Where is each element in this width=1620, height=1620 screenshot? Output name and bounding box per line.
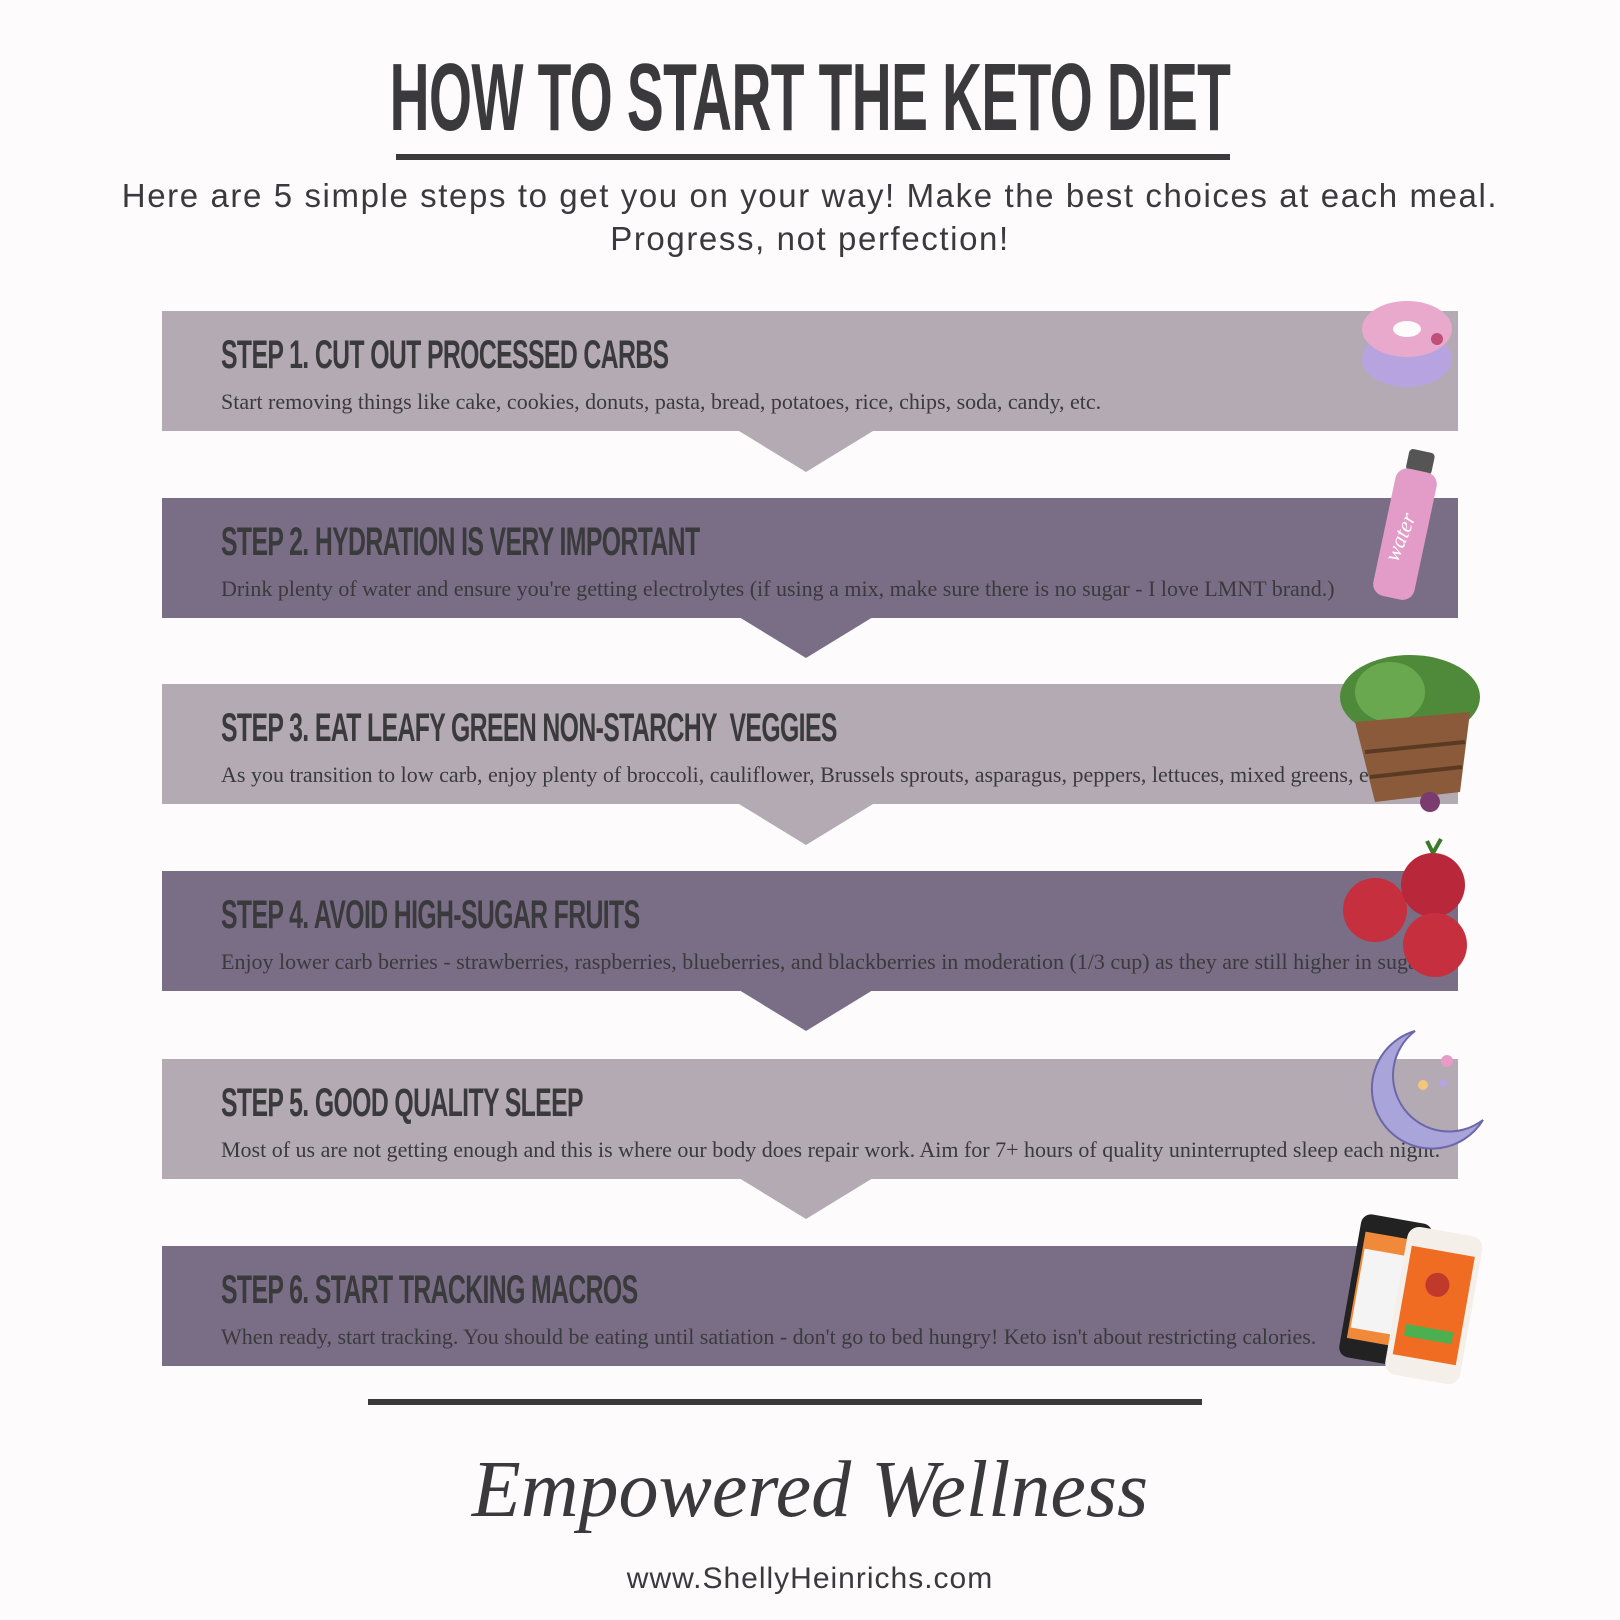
step 1 panel — [162, 311, 1458, 431]
step 4 panel — [162, 871, 1458, 991]
step 5 heading: STEP 5. GOOD QUALITY SLEEP — [221, 1081, 583, 1125]
step 1 heading: STEP 1. CUT OUT PROCESSED CARBS — [221, 333, 668, 377]
arrow 1 — [739, 431, 873, 472]
website url: www.ShellyHeinrichs.com — [627, 1562, 993, 1595]
title: HOW TO START THE KETO DIET — [390, 44, 1230, 151]
step 2 heading: STEP 2. HYDRATION IS VERY IMPORTANT — [221, 520, 700, 564]
step 3 panel — [162, 684, 1458, 804]
icon: moon — [1370, 1030, 1484, 1150]
step 3 heading: STEP 3. EAT LEAFY GREEN NON-STARCHY VEGGIES — [221, 706, 837, 750]
step 2 text: Drink plenty of water and ensure you're getting electrolytes (if using a mix, make sure there is no sugar - I love LMNT brand.) — [221, 576, 1335, 601]
step 4 text: Enjoy lower carb berries - strawberries, raspberries, blueberries, and blackberries in moderation (1/3 cup) as they are still higher in sugar. — [221, 949, 1429, 974]
step 6 heading: STEP 6. START TRACKING MACROS — [221, 1268, 638, 1312]
subtitle — [122, 177, 1498, 257]
step 2 panel — [162, 498, 1458, 618]
arrow 4 — [739, 990, 873, 1031]
step 4 heading: STEP 4. AVOID HIGH-SUGAR FRUITS — [221, 893, 640, 937]
icon: donuts — [1362, 301, 1452, 387]
title underline — [396, 154, 1230, 160]
icon: raspberries — [1343, 838, 1467, 977]
icon: water bottle — [1373, 449, 1437, 600]
icon: water bottle: water — [1379, 509, 1421, 565]
step 5 panel — [162, 1059, 1458, 1179]
step 5 text: Most of us are not getting enough and this is where our body does repair work. Aim for 7+ hours of quality uninterrupted sleep each night. — [221, 1137, 1440, 1162]
step 6 text: When ready, start tracking. You should be eating until satiation - don't go to bed hungry! Keto isn't about restricting calories. — [221, 1324, 1316, 1349]
arrow 3 — [739, 804, 873, 845]
step 3 text: As you transition to low carb, enjoy plenty of broccoli, cauliflower, Brussels sprouts, asparagus, peppers, lettuces, mixed greens, etc. — [221, 762, 1390, 787]
icon: veggie basket — [1340, 655, 1480, 812]
icon: phones — [1339, 1214, 1482, 1384]
step 6 panel — [162, 1246, 1458, 1366]
bottom divider — [368, 1399, 1202, 1405]
arrow 2 — [739, 617, 873, 658]
step 1 text: Start removing things like cake, cookies, donuts, pasta, bread, potatoes, rice, chips, soda, candy, etc. — [221, 389, 1101, 414]
subtitle: Progress, not perfection! — [610, 220, 1010, 257]
subtitle: Here are 5 simple steps to get you on your way! Make the best choices at each meal. — [122, 177, 1498, 214]
signature logo: Empowered Wellness — [472, 1446, 1148, 1534]
arrow 5 — [739, 1178, 873, 1219]
